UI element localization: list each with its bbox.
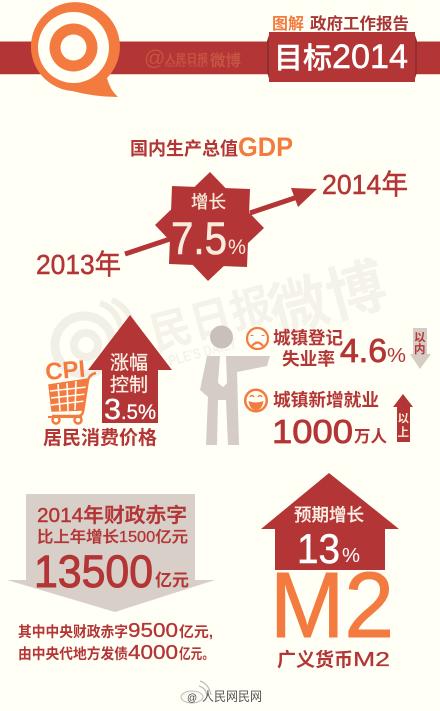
M2 caption: 广义货币 xyxy=(277,648,353,671)
2013 label: 2013年 xyxy=(36,249,121,280)
employment text: 万人 xyxy=(354,427,388,446)
CPI caption: 居民消费价格 xyxy=(43,427,157,449)
deficit notes: 亿元, xyxy=(179,624,213,641)
large background watermark xyxy=(55,251,393,374)
M2 house arrow: 预期增长 xyxy=(294,505,364,525)
deficit down arrow: 亿元 xyxy=(155,571,189,590)
deficit notes: 由中央代地方发债 xyxy=(18,645,128,663)
down arrow: within xyxy=(410,328,431,369)
up arrow: above xyxy=(393,394,413,442)
GDP heading: GDP xyxy=(238,132,293,162)
M2 house arrow: % xyxy=(342,545,360,567)
large background watermark: 微博 xyxy=(262,251,393,347)
source watermark: @ xyxy=(187,693,197,704)
large background watermark: 民日报 xyxy=(145,280,277,360)
header kicker: 图解 xyxy=(272,15,304,33)
icon: smile face xyxy=(245,390,267,411)
CPI up arrow: 3 xyxy=(104,394,121,426)
CPI label: CPI xyxy=(44,356,86,386)
GDP trend arrow xyxy=(125,188,317,254)
M2 caption xyxy=(277,648,390,671)
M2 house arrow: 13 xyxy=(297,525,340,572)
band watermark xyxy=(144,47,241,70)
title plate: 目标 xyxy=(274,42,332,75)
band watermark: 人民日报 xyxy=(165,51,208,65)
CPI up arrow: 涨幅 xyxy=(110,352,148,374)
logo: orange speech bubble target xyxy=(31,2,120,97)
growth star badge: % xyxy=(228,236,246,259)
header kicker xyxy=(272,14,409,33)
unemployment text: 4.6 xyxy=(340,332,387,369)
title plate: 2014 xyxy=(332,38,408,76)
header kicker: 政府工作报告 xyxy=(310,14,409,33)
unemployment text xyxy=(273,328,406,369)
deficit notes: 4000 xyxy=(128,642,178,664)
down arrow: within: 以 xyxy=(414,331,426,344)
deficit notes xyxy=(18,620,214,664)
source watermark xyxy=(181,681,262,704)
unemployment text: 失业率 xyxy=(282,349,335,369)
up arrow: above: 以 xyxy=(398,412,410,425)
title plate xyxy=(267,32,417,82)
deficit down arrow: 2014年财政赤字 xyxy=(37,504,187,527)
deficit down arrow: 13500 xyxy=(34,546,153,597)
deficit down arrow: 比上年增长1500亿元 xyxy=(37,528,188,546)
M2 house arrow xyxy=(261,473,399,572)
band watermark: 微博 xyxy=(210,51,241,70)
unemployment text: 城镇登记 xyxy=(273,328,343,348)
source watermark: 人民网民网 xyxy=(202,689,262,704)
M2 caption: M2 xyxy=(353,649,390,671)
M2 big label: M2 xyxy=(270,553,394,657)
CPI up arrow: 控制 xyxy=(110,374,148,396)
unemployment text: % xyxy=(387,345,406,367)
large background watermark: PLE'S DAILY xyxy=(167,335,239,370)
icon: sad face xyxy=(247,328,268,349)
CPI up arrow xyxy=(88,315,172,426)
GDP heading: 国内生产总值 xyxy=(130,139,238,159)
2014 label: 2014年 xyxy=(322,169,408,200)
employment text: 城镇新增就业 xyxy=(273,389,379,410)
up arrow: above: 上 xyxy=(398,426,410,439)
deficit down arrow xyxy=(7,494,215,612)
growth star badge: 7.5 xyxy=(171,213,227,264)
deficit notes: 亿元。 xyxy=(179,646,214,663)
header band xyxy=(0,41,440,75)
band watermark: PEOPLE' S DAILY xyxy=(165,63,209,69)
deficit notes: 其中中央财政赤字 xyxy=(18,623,128,641)
icon: shopping cart xyxy=(48,373,96,424)
growth star badge: 增长 xyxy=(191,192,226,212)
employment text xyxy=(272,389,388,450)
down arrow: within: 内 xyxy=(414,342,426,356)
CPI up arrow: .5% xyxy=(121,401,156,424)
icon: businessman figure xyxy=(200,326,270,445)
deficit notes: 9500 xyxy=(128,620,178,642)
GDP heading xyxy=(130,132,293,162)
band watermark: @ xyxy=(144,47,165,70)
growth star badge xyxy=(155,172,264,281)
employment text: 1000 xyxy=(272,413,353,450)
